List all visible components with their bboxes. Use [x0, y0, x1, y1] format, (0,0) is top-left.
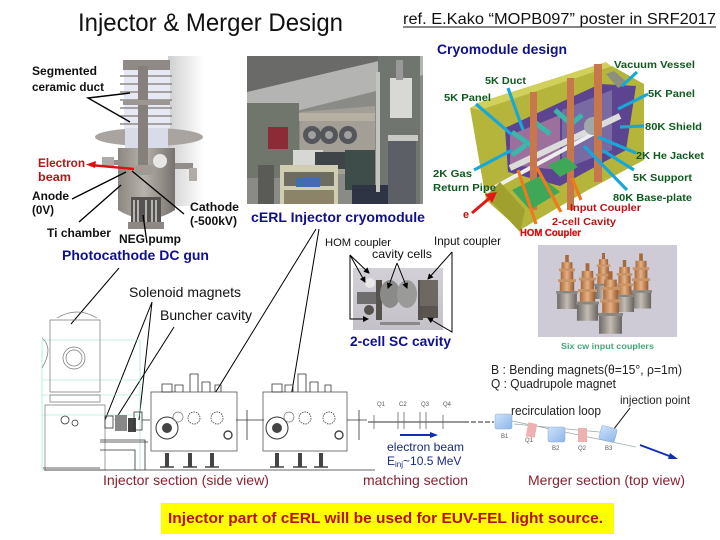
gun drawing — [95, 56, 204, 229]
callouts: 80K Base-plate — [613, 192, 692, 204]
injector side view drawing — [42, 312, 375, 470]
panel: photocathode DC gun — [32, 56, 239, 263]
label: Ti chamber — [47, 185, 121, 240]
label: NEG pump — [119, 215, 181, 246]
caption: six cw input couplers: Six cw input couplers — [561, 342, 655, 351]
electron beam arrow and label — [387, 432, 464, 469]
label: input coupler — [428, 235, 501, 332]
label: segmented ceramic duct: ceramic duct — [32, 80, 104, 94]
callouts: 2K Gas — [433, 168, 472, 180]
label: HOM coupler: HOM coupler — [325, 237, 391, 249]
label: cathode: (-500kV) — [190, 214, 237, 228]
electron beam arrow and label: inj — [395, 460, 403, 469]
legend: magnet key: B : Bending magnets(θ=15°, ρ=1m) — [491, 363, 682, 377]
callouts: HOM Coupler — [520, 228, 581, 239]
merger section drawing: B2 — [552, 446, 560, 452]
heading: cryomodule design: Cryomodule design — [437, 41, 567, 57]
label: segmented ceramic duct — [32, 64, 130, 122]
label: cavity cells: cavity cells — [372, 247, 432, 261]
title: Injector & Merger Design — [78, 9, 343, 37]
callouts: 5K Panel — [648, 88, 695, 100]
label: injection point — [610, 393, 691, 434]
callout: EUV-FEL note — [161, 503, 614, 534]
matching section drawing: C2 — [399, 402, 407, 408]
label: electron beam: Electron — [38, 156, 85, 170]
callout: EUV-FEL note: Injector part of cERL will be used for EUV-FEL light source. — [168, 511, 603, 527]
legend: magnet key: Q : Quadrupole magnet — [491, 377, 616, 391]
label: buncher cavity — [115, 307, 252, 420]
merger section drawing: Q2 — [578, 446, 587, 452]
leader lines from headings to beamline — [71, 229, 319, 403]
cryomodule 2 — [263, 374, 347, 467]
matching section drawing: Q3 — [421, 402, 430, 408]
label: cathode: Cathode — [190, 200, 239, 214]
callouts: 5K Panel — [444, 92, 491, 104]
caption: merger section: Merger section (top view) — [528, 472, 685, 488]
heading: photocathode DC gun: Photocathode DC gun — [62, 247, 209, 263]
gun line drawing — [42, 312, 145, 470]
panel: six cw input couplers photo — [538, 245, 677, 337]
cavity photo — [353, 268, 443, 330]
label: anode — [32, 172, 126, 217]
caption: injector section: Injector section (side view) — [103, 472, 269, 488]
cryomodule 1 — [151, 374, 237, 467]
caption: matching section: matching section — [363, 472, 468, 488]
label: input coupler: Input coupler — [434, 235, 501, 248]
connecting beamline pieces — [44, 410, 375, 470]
legend: magnet key — [491, 363, 682, 391]
photo: cERL injector cryomodule — [247, 56, 423, 204]
callouts: Vacuum Vessel — [614, 59, 695, 71]
reference note: ref. E.Kako “MOPB097” poster in SRF2017 — [403, 11, 716, 28]
callouts: 80K Shield — [645, 121, 702, 133]
heading: cERL injector cryomodule: cERL Injector cryomodule — [251, 209, 425, 225]
label: solenoid magnets: Solenoid magnets — [129, 284, 241, 300]
label: anode: (0V) — [32, 203, 54, 217]
label: buncher cavity: Buncher cavity — [160, 307, 252, 323]
label: cavity cells — [372, 247, 432, 288]
panel: 2-cell SC cavity — [325, 235, 501, 349]
label: anode: Anode — [32, 189, 69, 203]
cryomodule 3D cutaway — [470, 62, 644, 232]
callouts: Input Coupler — [570, 202, 641, 214]
label: Ti chamber: Ti chamber — [47, 226, 111, 240]
callouts: Return Pipe — [433, 182, 496, 194]
electron beam arrow and label: ~10.5 MeV — [403, 454, 461, 468]
electron beam arrow and label: electron beam — [387, 440, 464, 454]
callouts: e — [463, 209, 469, 221]
heading: 2-cell SC cavity: 2-cell SC cavity — [350, 333, 451, 349]
callouts — [433, 59, 705, 239]
matching section drawing: Q4 — [443, 402, 452, 408]
merger section drawing: B1 — [501, 434, 509, 440]
label: segmented ceramic duct: Segmented — [32, 64, 97, 78]
label: electron beam: beam — [38, 170, 71, 184]
label: electron beam — [38, 156, 134, 184]
matching section drawing — [368, 402, 494, 429]
label: solenoid magnets — [105, 284, 241, 420]
merger section drawing: B3 — [605, 446, 613, 452]
label: NEG pump: NEG pump — [119, 232, 181, 246]
callouts: 2K He Jacket — [636, 150, 705, 162]
merger section drawing — [495, 414, 678, 459]
magnets and buncher — [100, 412, 150, 442]
panel: cryomodule design — [433, 41, 705, 239]
label: HOM coupler — [325, 237, 391, 319]
electron beam arrow and label: E — [387, 454, 395, 468]
label: recirculation loop: recirculation loop — [511, 404, 601, 418]
callouts: 5K Duct — [485, 75, 527, 87]
matching section drawing: Q1 — [377, 402, 386, 408]
label: cathode — [132, 171, 239, 228]
merger section drawing: Q1 — [525, 438, 534, 444]
callouts: 2-cell Cavity — [552, 216, 616, 228]
label: injection point: injection point — [620, 393, 691, 407]
callouts: 5K Support — [633, 172, 693, 184]
